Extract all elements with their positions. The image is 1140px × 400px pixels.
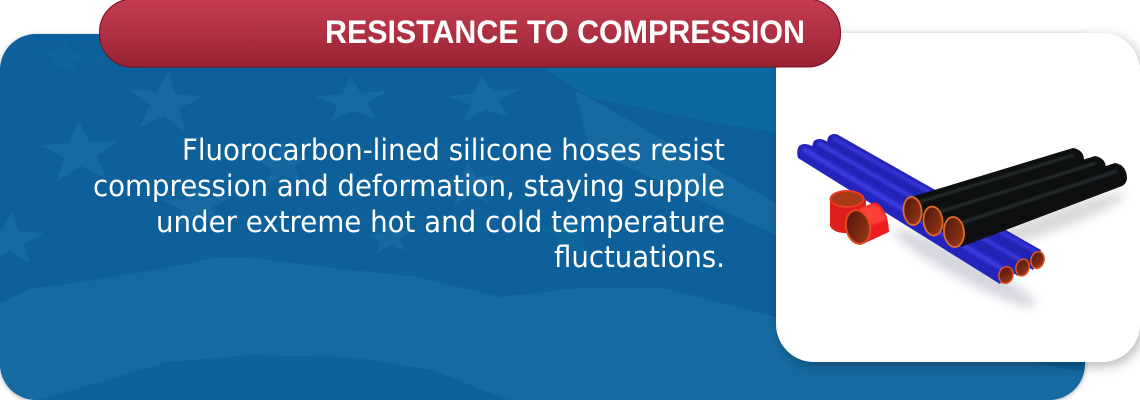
- upper right lighter fold: [544, 68, 776, 132]
- flag wave: [0, 258, 1085, 400]
- diagonal fold streak: [575, 90, 776, 235]
- heading banner: [100, 0, 840, 67]
- blue hoses: [797, 134, 1046, 285]
- dark lower fold: [37, 355, 510, 400]
- black hoses: [902, 148, 1127, 248]
- heading text: RESISTANCE TO COMPRESSION: [325, 14, 805, 50]
- body text: fluctuations.: [554, 240, 725, 274]
- product photo: silicone hoses: [797, 134, 1129, 316]
- flag stars: [0, 35, 600, 264]
- body text: compression and deformation, staying supple: [93, 169, 725, 203]
- body text: under extreme hot and cold temperature: [156, 205, 725, 239]
- red couplers: [830, 191, 889, 246]
- body text: [93, 133, 725, 274]
- panel: white product image card: [776, 33, 1140, 362]
- body text: Fluorocarbon-lined silicone hoses resist: [182, 133, 725, 167]
